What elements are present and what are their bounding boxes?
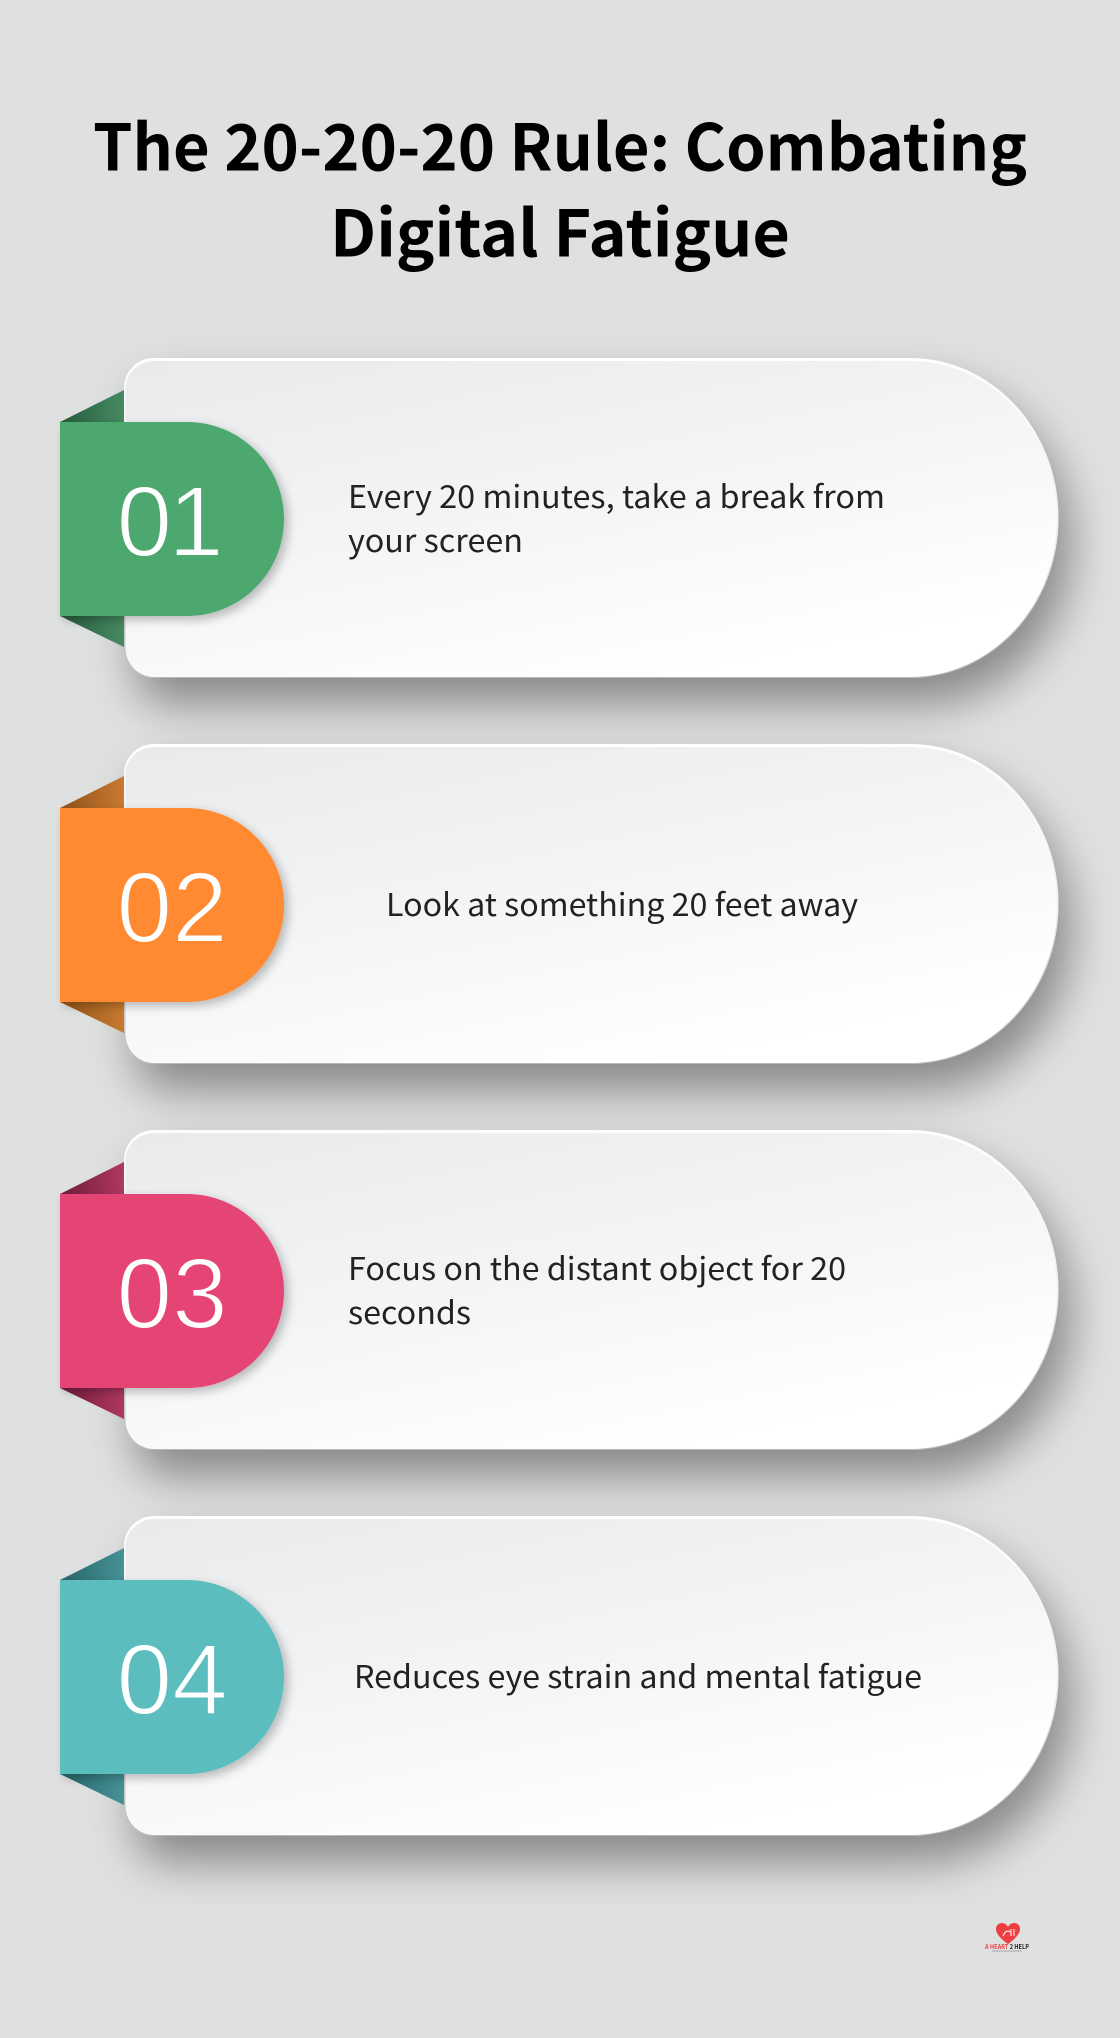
fold shadows 4 — [60, 1548, 124, 1805]
card 1 — [124, 358, 1058, 678]
fold shadows 1 — [60, 390, 124, 647]
text 1: Every 20 minutes, take a break from — [348, 472, 885, 518]
number 2: 02 — [116, 852, 228, 964]
title: Digital Fatigue — [330, 184, 790, 276]
badge 2 — [60, 808, 284, 1002]
text 1 — [348, 472, 885, 562]
text 1: your screen — [348, 516, 523, 562]
text 3 — [348, 1244, 846, 1334]
text 3: seconds — [348, 1288, 471, 1334]
logo text: A HEART 2 HELP — [984, 1941, 1030, 1951]
number 1: 01 — [116, 466, 224, 578]
text 3: Focus on the distant object for 20 — [348, 1244, 846, 1290]
card 4 — [124, 1516, 1058, 1836]
step 2 panel — [60, 744, 1058, 1064]
fold shadows 3 — [60, 1162, 124, 1419]
text 4: Reduces eye strain and mental fatigue — [354, 1652, 922, 1698]
step 1 panel — [60, 358, 1058, 678]
number 3: 03 — [116, 1238, 228, 1350]
text 2: Look at something 20 feet away — [386, 880, 858, 926]
badge 1 — [60, 422, 284, 616]
title: The 20-20-20 Rule: Combating — [93, 98, 1027, 190]
fold shadows 2 — [60, 776, 124, 1033]
title — [93, 98, 1027, 276]
step 4 panel — [60, 1516, 1058, 1836]
card 3 — [124, 1130, 1058, 1450]
logo tagline — [992, 1950, 1022, 1952]
logo: A Heart 2 Help — [984, 1923, 1030, 1952]
icon: hands in heart — [1003, 1929, 1014, 1936]
step 3 panel — [60, 1130, 1058, 1450]
badge 3 — [60, 1194, 284, 1388]
card 2 — [124, 744, 1058, 1064]
badge 4 — [60, 1580, 284, 1774]
number 4: 04 — [116, 1624, 228, 1736]
icon: heart — [996, 1923, 1020, 1944]
